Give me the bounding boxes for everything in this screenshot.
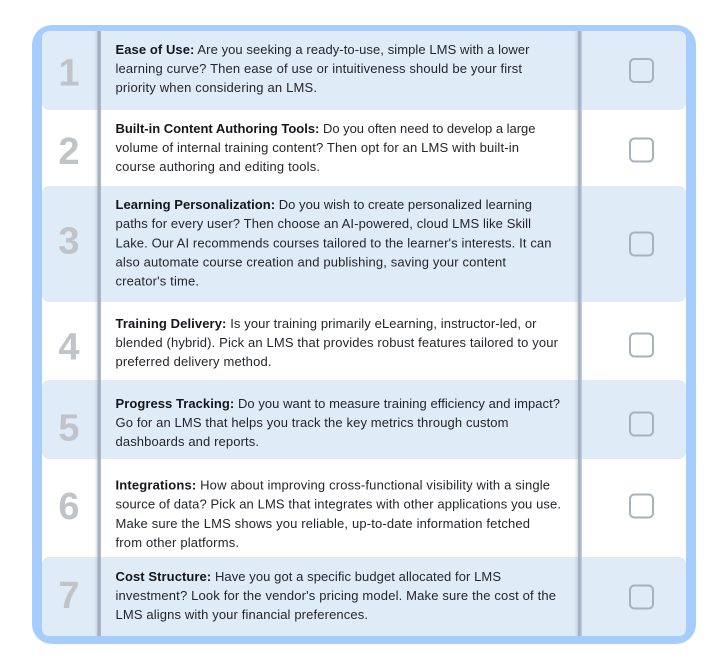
checkbox 1 — [630, 59, 653, 82]
text: cost structure — [116, 569, 556, 622]
text: learning personalization: Learning Personalization: Do you wish to create personalized learning — [116, 197, 532, 212]
text: progress tracking: dashboards and reports. — [116, 434, 259, 449]
text: integrations: Make sure the LMS shows you reliable, up-to-date information fetched — [116, 516, 530, 531]
checkbox 3 — [630, 232, 653, 256]
text: progress tracking: Go for an LMS that helps you track the key metrics through custom — [116, 415, 508, 430]
text: training delivery: preferred delivery method. — [116, 354, 272, 369]
text: integrations — [116, 478, 561, 550]
text: learning personalization: paths for every user? Then choose an AI-powered, cloud LMS like Skill — [116, 216, 531, 231]
number 6: 6 — [58, 486, 80, 528]
text: progress tracking: Progress Tracking: Do you want to measure training efficiency and impact? — [116, 396, 560, 411]
row 4: training delivery — [58, 316, 653, 369]
text: ease of use: Ease of Use: Are you seeking a ready-to-use, simple LMS with a lower — [116, 42, 530, 57]
row 6: integrations — [58, 478, 653, 550]
text: ease of use: learning curve? Then ease of use or intuitiveness should be your first — [116, 61, 522, 76]
row 3: learning personalization — [42, 186, 686, 302]
number 1: 1 — [58, 52, 80, 94]
text: learning personalization — [116, 197, 552, 288]
text: progress tracking — [116, 396, 560, 449]
row 1: ease of use — [42, 31, 686, 110]
number 2: 2 — [58, 131, 80, 173]
number 4: 4 — [58, 326, 80, 368]
row 5: progress tracking — [42, 380, 686, 459]
text: ease of use: priority when considering an LMS. — [116, 80, 317, 95]
row 7: cost structure — [42, 557, 686, 636]
checkbox 2 — [630, 138, 653, 162]
row 2: content authoring — [58, 121, 653, 174]
checkbox 7 — [630, 586, 653, 608]
text: content authoring — [116, 121, 536, 174]
text: cost structure: Cost Structure: Have you got a specific budget allocated for LMS — [116, 569, 501, 584]
text: integrations: Integrations: How about improving cross-functional visibility with a single — [116, 478, 550, 492]
text: integrations: source of data? Pick an LMS that integrates with other applications you use. — [116, 496, 561, 512]
text: learning personalization: creator's time. — [116, 274, 199, 288]
checkbox 4 — [630, 334, 653, 356]
text: training delivery: Training Delivery: Is your training primarily eLearning, instructor-led, or — [116, 316, 537, 331]
text: training delivery — [116, 316, 559, 369]
text: integrations: from other platforms. — [116, 535, 239, 550]
text: learning personalization: Lake. Our AI recommends courses tailored to the learner's interests. It can — [116, 236, 552, 250]
text: training delivery: blended (hybrid). Pick an LMS that provides robust features tailored to your — [116, 335, 559, 350]
checkbox 5 — [630, 412, 653, 436]
text: cost structure: investment? Look for the vendor's pricing model. Make sure the cost of the — [116, 588, 556, 603]
text: content authoring: volume of internal training content? Then opt for an LMS with built-in — [116, 140, 519, 155]
checkbox 6 — [630, 494, 653, 518]
number 7: 7 — [58, 575, 80, 617]
number 5: 5 — [58, 408, 80, 450]
text: learning personalization: also automate course creation and publishing, saving your content — [116, 254, 506, 270]
number 3: 3 — [58, 220, 80, 262]
text: cost structure: LMS aligns with your financial preferences. — [116, 607, 368, 622]
text: content authoring: course authoring and editing tools. — [116, 159, 320, 174]
text: content authoring: Built-in Content Authoring Tools: Do you often need to develop a large — [116, 121, 536, 136]
text: ease of use — [116, 42, 530, 95]
